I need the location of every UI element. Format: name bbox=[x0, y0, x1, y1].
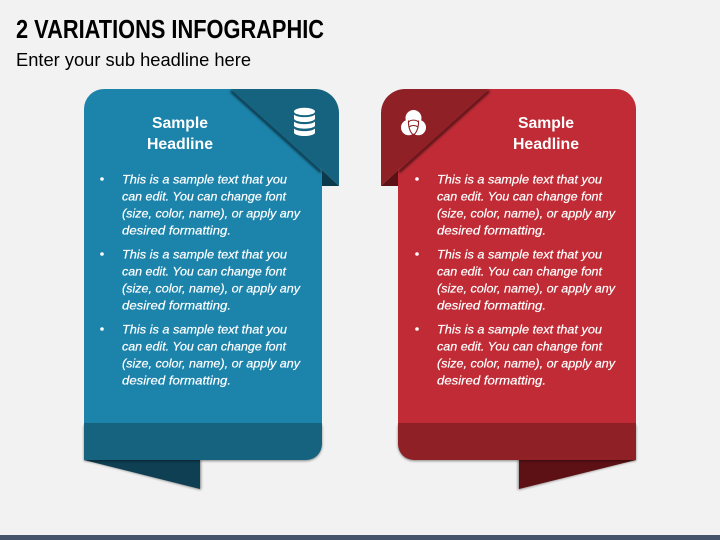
blue bullet list: (size, color, name), or apply any bbox=[122, 356, 301, 370]
blue bullet list: desired formatting. bbox=[122, 298, 231, 312]
red bullet list bbox=[415, 172, 616, 388]
blue heading: Sample bbox=[152, 115, 208, 132]
red bullet list: (size, color, name), or apply any bbox=[437, 356, 616, 370]
title: 2 VARIATIONS INFOGRAPHIC bbox=[16, 16, 324, 44]
blue ribbon tail bbox=[84, 460, 201, 490]
blue bullet list: This is a sample text that you bbox=[122, 322, 287, 336]
red card body bbox=[398, 89, 636, 423]
blue bullet list: This is a sample text that you bbox=[122, 248, 287, 262]
blue card body bbox=[84, 89, 322, 423]
blue bullet list: (size, color, name), or apply any bbox=[122, 282, 301, 296]
red ribbon tail bbox=[518, 460, 636, 490]
red bullet list: desired formatting. bbox=[437, 298, 546, 312]
panel: blue variation bbox=[84, 89, 339, 490]
blue bullet list bbox=[100, 172, 301, 388]
blue bullet list: can edit. You can change font bbox=[122, 340, 287, 354]
red bullet list: desired formatting. bbox=[437, 374, 546, 388]
red bullet list: can edit. You can change font bbox=[437, 264, 603, 278]
icon: database bbox=[294, 108, 315, 136]
red heading bbox=[513, 115, 579, 153]
red bullet list: can edit. You can change font bbox=[437, 190, 603, 204]
blue bullet list: can edit. You can change font bbox=[122, 264, 287, 278]
blue bullet list: (size, color, name), or apply any bbox=[122, 206, 301, 220]
footer bar bbox=[0, 535, 720, 540]
blue bullet list: can edit. You can change font bbox=[122, 190, 287, 204]
red footer band bbox=[398, 423, 636, 461]
red bullet list: This is a sample text that you bbox=[437, 248, 602, 262]
blue corner fold bbox=[232, 89, 339, 186]
red corner fold bbox=[381, 89, 488, 186]
blue bullet list: This is a sample text that you bbox=[122, 172, 287, 186]
icon: overlapping circles bbox=[401, 110, 426, 135]
blue bullet list: desired formatting. bbox=[122, 374, 231, 388]
red bullet list: desired formatting. bbox=[437, 224, 546, 238]
red bullet list: This is a sample text that you bbox=[437, 322, 602, 336]
subtitle: Enter your sub headline here bbox=[16, 49, 251, 70]
red bullet list: (size, color, name), or apply any bbox=[437, 282, 616, 296]
red bullet list: (size, color, name), or apply any bbox=[437, 206, 616, 220]
red heading: Headline bbox=[513, 136, 579, 153]
blue bullet list: desired formatting. bbox=[122, 224, 231, 238]
panel: red variation bbox=[379, 89, 636, 490]
blue heading bbox=[147, 115, 213, 153]
red bullet list: can edit. You can change font bbox=[437, 340, 603, 354]
red bullet list: This is a sample text that you bbox=[437, 172, 602, 186]
blue heading: Headline bbox=[147, 136, 213, 153]
red heading: Sample bbox=[518, 115, 574, 132]
blue footer band bbox=[84, 423, 322, 461]
